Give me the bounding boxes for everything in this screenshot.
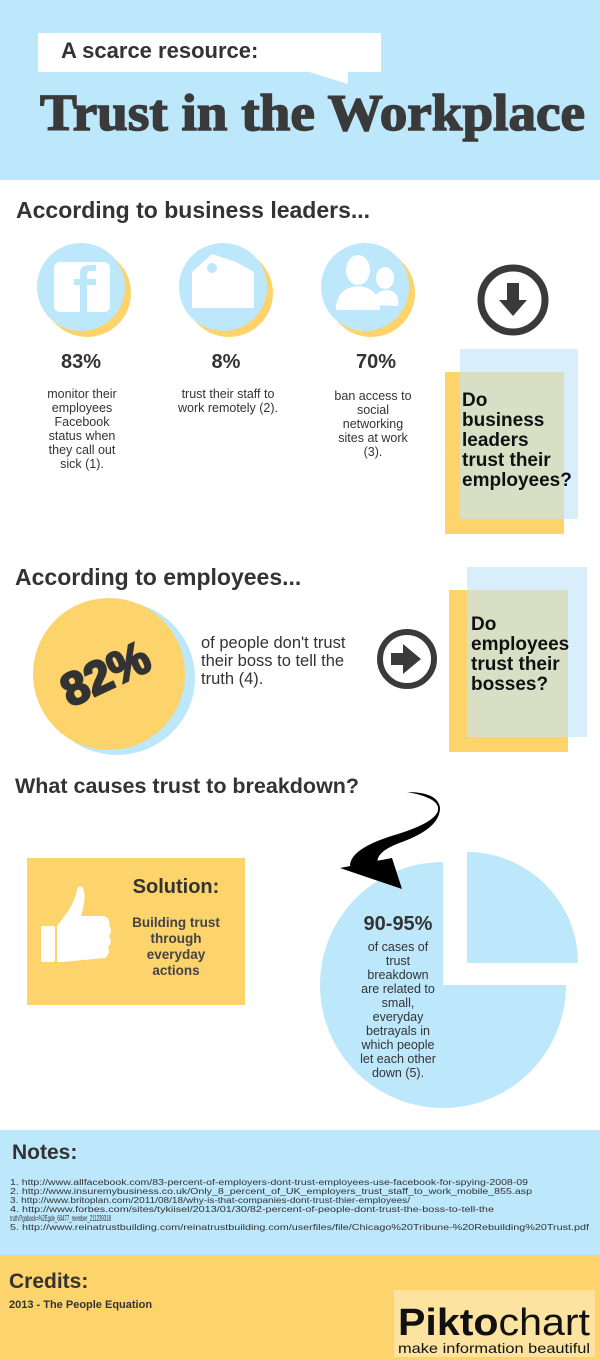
icon: house clock [192, 254, 254, 308]
icon: facebook [54, 262, 110, 312]
stat: social 70%: sites at work [338, 431, 408, 445]
icon: right arrow circle [380, 632, 434, 686]
heading: employees: According to employees... [15, 564, 301, 590]
panel: solution [27, 858, 245, 1005]
text: 82% description: truth (4). [201, 670, 263, 688]
pie chart: which people [361, 1038, 435, 1052]
panel: solution: Building trust [132, 915, 220, 930]
question box: employees: trust their [471, 654, 560, 675]
stat: 82% circle: 82% [53, 630, 158, 717]
stat: remote work 8% [177, 243, 278, 415]
heading: causes: What causes trust to breakdown? [15, 774, 359, 798]
question box: employees: Do [471, 614, 496, 635]
stat: facebook 83% [37, 243, 131, 471]
question box: business leaders: trust their [462, 450, 551, 471]
panel: credits: 2013 - The People Equation [9, 1299, 152, 1311]
stat: facebook 83%: monitor their [47, 387, 117, 401]
pie chart: down (5). [372, 1066, 424, 1080]
stat: social 70%: (3). [364, 445, 382, 459]
pie chart: betrayals in [366, 1024, 430, 1038]
header band [0, 0, 600, 180]
icon: users [336, 255, 398, 310]
panel: solution: everyday [147, 947, 206, 962]
subtitle speech box: A scarce resource: [61, 38, 258, 63]
logo: piktochart: make information beautiful [398, 1340, 590, 1356]
logo: piktochart [394, 1290, 595, 1357]
question box: employees: employees [471, 634, 569, 655]
panel: notes: truth/?goback=%2Egde_60477_member_211239318 [10, 1214, 111, 1223]
stat: remote work 8%: trust their staff to [182, 387, 274, 401]
stat: social 70%: 70% [356, 351, 396, 373]
question box: employees [449, 567, 587, 752]
stat: remote work 8%: 8% [212, 351, 241, 373]
panel: solution: Solution: [133, 876, 219, 898]
heading: business leaders: According to business leaders... [16, 197, 370, 223]
stat: facebook 83%: employees [52, 401, 112, 415]
question box: business leaders: Do [462, 390, 487, 411]
panel: credits: Credits: [9, 1270, 88, 1293]
panel: notes: 3. http://www.britoplan.com/2011/08/18/why-is-that-companies-dont-trust-thier-employees/ [10, 1196, 411, 1205]
panel: solution: through [151, 931, 201, 946]
text: 82% description: of people don't trust [201, 634, 346, 652]
stat: social 70%: networking [343, 417, 403, 431]
pie chart: breakdown [367, 968, 429, 982]
panel: solution: actions [152, 963, 200, 978]
pie chart: of cases of [368, 940, 429, 954]
pie chart: let each other [360, 1052, 436, 1066]
pie chart: small, [382, 996, 414, 1010]
stat: facebook 83%: 83% [61, 351, 101, 373]
panel: notes: Notes: [12, 1141, 77, 1164]
panel: notes: 4. http://www.forbes.com/sites/tykiisel/2013/01/30/82-percent-of-people-dont-trust-the-boss-to-tell-the [10, 1205, 495, 1214]
stat: social 70%: ban access to [334, 389, 412, 403]
panel: credits [0, 1255, 600, 1360]
stat: facebook 83%: sick (1). [60, 457, 104, 471]
stat: social 70% [321, 243, 415, 459]
pie chart: are related to [361, 982, 435, 996]
pie chart: everyday [373, 1010, 424, 1024]
stat: facebook 83%: status when [49, 429, 115, 443]
title: Trust in the Workplace [40, 85, 585, 142]
stat: social 70%: social [357, 403, 389, 417]
stat: facebook 83%: they call out [49, 443, 116, 457]
pie chart [320, 852, 578, 1108]
icon: down arrow circle [481, 268, 545, 332]
panel: notes [0, 1130, 600, 1255]
stat: facebook 83%: Facebook [55, 415, 110, 429]
pie chart: 90-95% [364, 913, 433, 935]
question box: employees: bosses? [471, 674, 548, 695]
pie chart: trust [386, 954, 411, 968]
arrow: curvy black [340, 792, 440, 889]
stat: 82% circle [33, 598, 195, 755]
question box: business leaders: business [462, 410, 544, 431]
panel: notes: 1. http://www.allfacebook.com/83-percent-of-employers-dont-trust-employees-use-facebook-for-spying-2008-09 [10, 1178, 529, 1187]
subtitle speech box [38, 33, 381, 84]
question box: business leaders [445, 349, 578, 534]
text: 82% description: their boss to tell the [201, 652, 344, 670]
panel: notes: 5. http://www.reinatrustbuilding.com/reinatrustbuilding.com/userfiles/file/Chicago%20Tribune-%20Rebuilding%20Trust.pdf [10, 1223, 590, 1232]
question box: business leaders: leaders [462, 430, 529, 451]
question box: business leaders: employees? [462, 470, 572, 491]
logo: piktochart: Piktochart [398, 1302, 590, 1344]
stat: remote work 8%: work remotely (2). [177, 401, 278, 415]
panel: notes: 2. http://www.insuremybusiness.co.uk/Only_8_percent_of_UK_employers_trust_staff_to_work_mobile_855.asp [10, 1187, 533, 1196]
icon: thumbs up [41, 886, 111, 962]
